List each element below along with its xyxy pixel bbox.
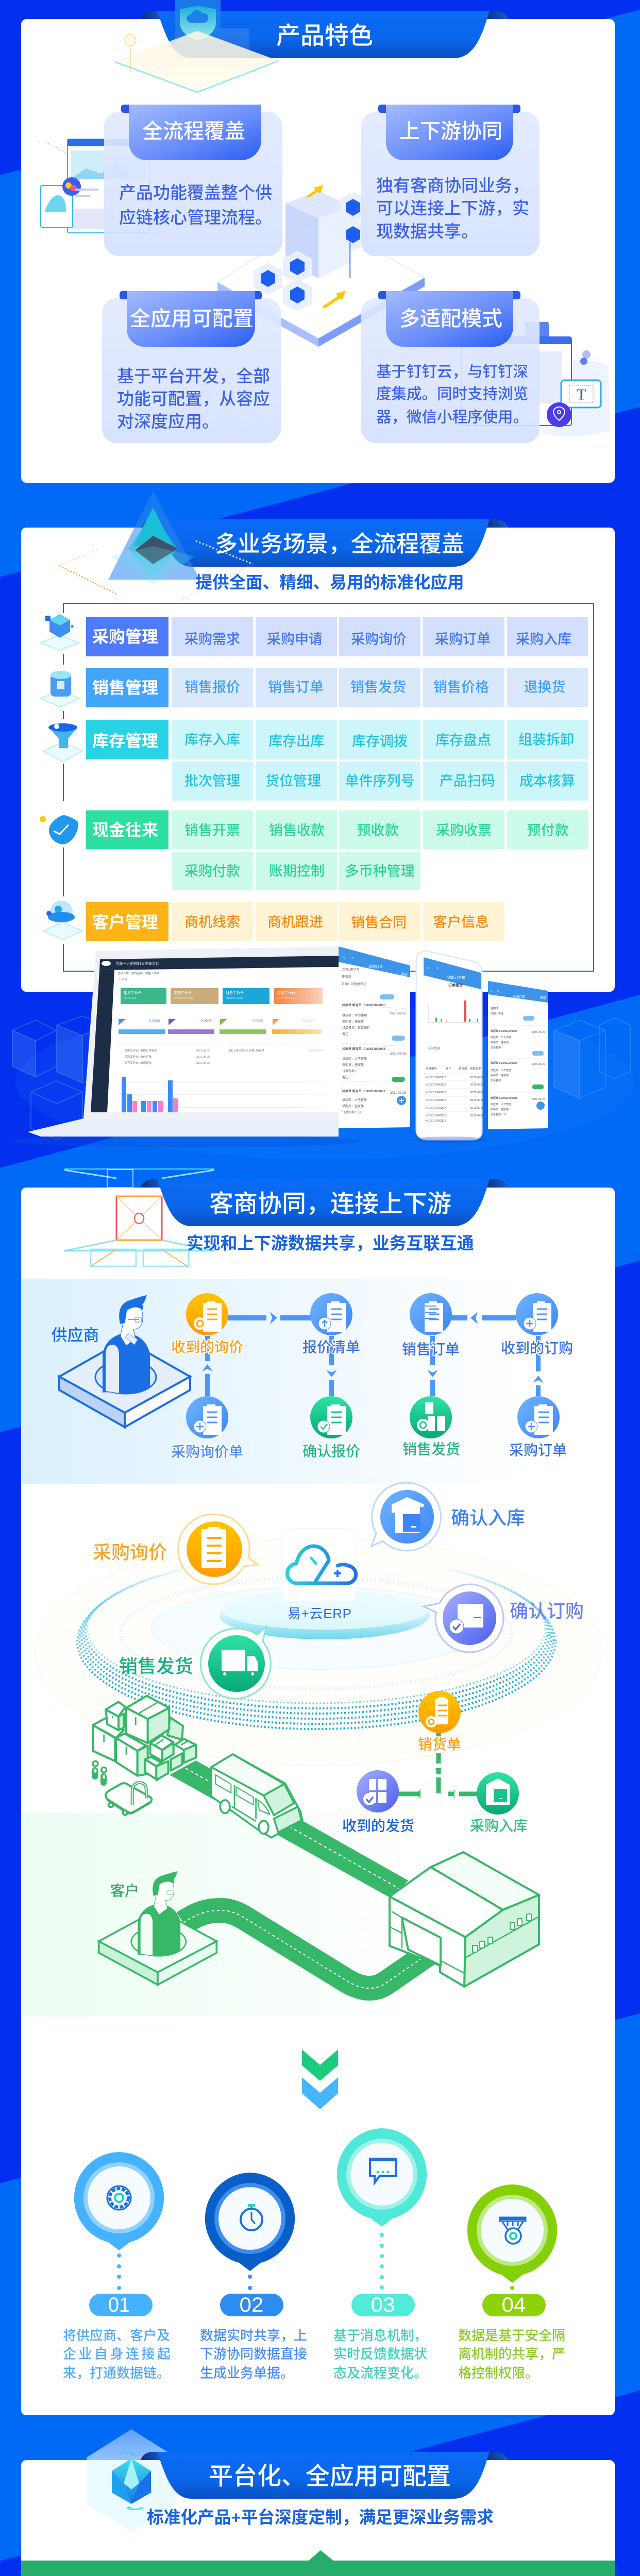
phone mockup left: 备注： bbox=[342, 1032, 351, 1036]
mini flow: 销货单 bbox=[342, 1691, 528, 1834]
laptop mockup: 2021-09-26 bbox=[196, 1062, 210, 1065]
decoration: diamond platform bbox=[115, 31, 279, 92]
laptop mockup: SALES DESK bbox=[124, 996, 137, 999]
supplier figure bbox=[52, 1295, 190, 1427]
card: 全应用可配置: 基于平台开发，全部 bbox=[117, 367, 270, 385]
heading ribbon: 产品特色: 产品特色 bbox=[276, 22, 373, 49]
phone mockup left: 供应商：华为伟利 bbox=[342, 1013, 367, 1018]
phone mockup right: 任丽涛 bbox=[491, 1007, 498, 1010]
phone mockup left: 订单名称：某位物料 bbox=[342, 1026, 370, 1030]
subtitle: 提供全面、精细、易用的标准化应用 bbox=[195, 573, 464, 591]
icon: customer globe bbox=[39, 896, 83, 944]
pin 01: gear: 将供应商、客户及 bbox=[63, 2328, 170, 2343]
icon: purchasing cube bbox=[39, 613, 80, 654]
decoration: app windows right bbox=[461, 322, 610, 436]
phone mockup right: 供应商：大华智能 bbox=[491, 1103, 511, 1106]
row: 采购管理: 采购询价 bbox=[351, 632, 407, 647]
phone mockup middle: XSDD*JIRXD02 bbox=[426, 1099, 446, 1102]
card: 上下游协同: 现数据共享。 bbox=[376, 222, 478, 241]
laptop mockup: 我的桌面 bbox=[131, 971, 143, 975]
phone mockup middle: XSDD*JIRXD02 bbox=[426, 1107, 446, 1110]
phone mockup left: 任丽涛 bbox=[342, 975, 351, 979]
icon: cash shield bbox=[39, 801, 80, 848]
phone mockup right: 采购员：任家旗 bbox=[491, 1108, 509, 1111]
phone mockup middle: × bbox=[436, 967, 439, 971]
row: 销售管理: 销售发货 bbox=[350, 680, 406, 695]
laptop mockup: FINANCIAL DESK bbox=[226, 996, 243, 999]
phone mockup right: 相原单 CO0021090001 bbox=[491, 1096, 517, 1100]
laptop mockup: 0.0000 bbox=[149, 1019, 160, 1023]
bubble: 确认入库: 确认入库 bbox=[451, 1507, 525, 1528]
pin 01: gear: 来，打通数据链。 bbox=[63, 2365, 170, 2381]
phone mockup left: < bbox=[343, 956, 345, 960]
bubble: 确认入库 bbox=[372, 1483, 525, 1551]
laptop mockup: [本工单+库存工作单] 待审核 bbox=[229, 1048, 265, 1053]
node: 采购询价单: 采购询价单 bbox=[171, 1444, 243, 1460]
row: 采购管理: 采购申请 bbox=[267, 632, 323, 647]
laptop mockup: 2021-09-26 bbox=[196, 1056, 210, 1059]
decoration: app windows left bbox=[39, 139, 173, 234]
mini flow: 销货单: 销货单 bbox=[418, 1736, 461, 1753]
row: 库存管理: 库存管理 bbox=[92, 732, 158, 750]
phone mockup left: 备注： bbox=[342, 1075, 351, 1079]
row: 客户管理: 销售合同 bbox=[351, 915, 407, 930]
icon: sales cylinder bbox=[39, 665, 80, 711]
row: 现金往来: 预付款 bbox=[527, 823, 569, 838]
row: 库存管理: 成本核算 bbox=[519, 773, 575, 789]
row: 采购管理 bbox=[86, 617, 588, 656]
phone mockup middle: 2021-09-06 bbox=[470, 1083, 484, 1087]
row: 现金往来: 销售收款 bbox=[269, 823, 325, 838]
laptop mockup bbox=[28, 946, 339, 1137]
node: 收到的询价: 收到的询价 bbox=[171, 1340, 243, 1355]
card: 多适配模式: 基于钉钉云，与钉钉深 bbox=[376, 364, 528, 380]
phone mockup middle: XSDD*JIRXD02 bbox=[426, 1120, 446, 1123]
phone mockup middle: 2021-09-06 bbox=[470, 1076, 484, 1079]
phone mockup right: < bbox=[491, 990, 493, 993]
phone mockup left: 您有1笔待办 bbox=[342, 968, 359, 972]
phone mockup middle: XSDD*JIRXD02 bbox=[426, 1083, 446, 1087]
node: 确认报价: 确认报价 bbox=[302, 1444, 360, 1459]
illustration: delivery road bbox=[170, 1760, 408, 1899]
illustration: delivery van bbox=[211, 1754, 302, 1838]
card: 多适配模式: 器，微信小程序使用。 bbox=[376, 409, 528, 426]
laptop mockup: 内部平元的物料仓库都大代 bbox=[116, 961, 159, 965]
phone mockup right: 相原单 CO0021090005 bbox=[491, 1029, 517, 1033]
phone mockup middle: 2021-09-06 bbox=[470, 1099, 484, 1102]
pin 01: gear bbox=[63, 2152, 171, 2381]
supplier figure: 供应商 bbox=[52, 1326, 99, 1345]
illustration: customer figure bbox=[99, 1871, 216, 1985]
phone mockup right: 供应商：大华智能 bbox=[491, 1069, 511, 1072]
bubble: 确认订购 bbox=[424, 1584, 584, 1652]
row: 现金往来: 账期控制 bbox=[269, 863, 325, 879]
subtitle: 标准化产品+平台深度定制，满足更深业务需求 bbox=[147, 2508, 494, 2527]
app tile: 易+云ERP bbox=[282, 1529, 356, 1621]
supplier flow band bbox=[21, 1279, 615, 1484]
phone mockup middle: 销售额 bbox=[459, 1066, 467, 1071]
phone mockup left: 日期：可根据筛记 bbox=[342, 982, 366, 986]
bubble: 销售发货 bbox=[119, 1626, 271, 1699]
laptop mockup: 采购工作台 bbox=[174, 990, 192, 995]
row: 库存管理: 批次管理 bbox=[184, 773, 240, 789]
node: 采购询价单 bbox=[171, 1396, 243, 1460]
node: 收到的订购: 收到的订购 bbox=[501, 1341, 573, 1356]
laptop mockup: [库存工作台] 单据审核 bbox=[124, 1061, 152, 1065]
phone mockup middle: 2021-09-06 bbox=[470, 1107, 484, 1110]
pin 03: chat: 03 bbox=[371, 2294, 395, 2316]
laptop mockup: 选项工作 bbox=[117, 971, 129, 975]
pin 02: clock bbox=[200, 2173, 307, 2381]
panel: multi-scenario bbox=[21, 491, 615, 1143]
pin 01: gear: 01 bbox=[108, 2294, 130, 2316]
card: 全应用可配置: 对深度应用。 bbox=[117, 412, 219, 431]
pin 03: chat bbox=[333, 2128, 427, 2381]
mini flow: 销货单: 采购入库 bbox=[470, 1818, 528, 1834]
laptop mockup: [采购工作台] 询价订单 bbox=[124, 1055, 152, 1059]
bubble: 销售发货: 销售发货 bbox=[119, 1656, 193, 1676]
node: 确认报价 bbox=[302, 1396, 360, 1459]
phone mockup left bbox=[339, 946, 410, 1128]
phone mockup middle: XSDD*JIRXD02 bbox=[426, 1114, 446, 1117]
pin 01: gear: 企业自身连接起 bbox=[63, 2346, 171, 2362]
phone mockup right: 2021-09-26 bbox=[532, 1063, 545, 1066]
phone mockup right: 采购员：任家旗 bbox=[491, 1074, 509, 1077]
pin 04: medal: 数据是基于安全隔 bbox=[458, 2328, 565, 2343]
phone mockup middle: 订单图谱 bbox=[448, 983, 463, 987]
card: 全流程覆盖: 全流程覆盖 bbox=[142, 120, 245, 143]
phone mockup left: 采购员：任家旗 bbox=[342, 1063, 364, 1067]
phone mockup left: 采购订单 bbox=[368, 964, 383, 969]
subtitle: 实现和上下游数据共享，业务互联互通 bbox=[187, 1233, 474, 1253]
heading ribbon: 平台化、全应用可配置 bbox=[141, 2452, 508, 2499]
card: 上下游协同 bbox=[361, 105, 540, 256]
phone mockup right: 订单名称： bbox=[491, 1079, 503, 1082]
phone mockup left: × bbox=[351, 956, 353, 960]
phone mockup right: 2021-09-26 bbox=[532, 1098, 545, 1101]
phone mockup left: 订单名称：23 bbox=[342, 1110, 361, 1114]
node: 采购订单: 采购订单 bbox=[509, 1443, 567, 1458]
app tile: 易+云ERP: 易+云ERP bbox=[288, 1606, 351, 1621]
mini flow: 销货单: 收到的发货 bbox=[342, 1818, 414, 1834]
flow connectors bbox=[202, 1312, 544, 1396]
icon: shield with cloud bbox=[175, 0, 221, 44]
heading ribbon: 多业务场景，全流程覆盖 bbox=[141, 519, 508, 567]
laptop mockup: 0.0000 bbox=[252, 1019, 263, 1023]
laptop mockup: 2021-09-26 bbox=[309, 1049, 324, 1053]
phone mockup left: 筛选 bbox=[401, 972, 408, 977]
row: 销售管理: 销售管理 bbox=[92, 679, 158, 697]
row: 采购管理: 采购管理 bbox=[92, 628, 158, 646]
heading ribbon: 平台化、全应用可配置: 平台化、全应用可配置 bbox=[209, 2463, 451, 2489]
row: 销售管理: 销售价格 bbox=[433, 680, 489, 695]
pin 04: medal: 04 bbox=[502, 2294, 526, 2316]
node: 收到的询价 bbox=[171, 1293, 243, 1355]
icon: crystal gem bbox=[112, 2452, 151, 2510]
phone mockup right: × bbox=[497, 990, 499, 993]
laptop mockup: 销售工作台 bbox=[124, 990, 142, 995]
row: 销售管理 bbox=[86, 668, 588, 707]
laptop mockup: 销售工作台 bbox=[145, 971, 160, 975]
phone mockup right: 订单名称：25 bbox=[491, 1113, 507, 1116]
phone mockup middle: < bbox=[427, 967, 429, 971]
laptop mockup: 0.0000 bbox=[200, 1019, 212, 1023]
pin 04: medal: 格控制权限。 bbox=[458, 2365, 538, 2381]
phone mockup right: 供应商：华为伟利 bbox=[491, 1036, 511, 1039]
laptop mockup: 财务工作台 bbox=[226, 990, 244, 995]
row: 现金往来 bbox=[86, 810, 588, 890]
card: 全流程覆盖 bbox=[104, 105, 282, 256]
pin 02: clock: 下游协同数据直接 bbox=[200, 2346, 307, 2362]
phone mockup left: 相原单 眼克单: CO0021090005 bbox=[342, 1003, 385, 1007]
row: 采购管理: 采购入库 bbox=[516, 632, 571, 647]
bubble: 采购询价 bbox=[93, 1514, 258, 1584]
row: 库存管理: 库存盘点 bbox=[435, 733, 491, 748]
heading ribbon: 客商协同，连接上下游: 客商协同，连接上下游 bbox=[209, 1190, 451, 1217]
row: 销售管理: 退换货 bbox=[524, 680, 566, 695]
node: 采购订单 bbox=[509, 1396, 567, 1458]
panel: product features bbox=[21, 0, 615, 483]
rings behind ERP hub bbox=[35, 1538, 602, 1765]
phone mockup right: 2021-09-26 bbox=[532, 1031, 545, 1034]
frame around module table bbox=[63, 603, 594, 971]
phone mockup right bbox=[488, 981, 548, 1129]
card: 全应用可配置: 功能可配置，从容应 bbox=[117, 389, 270, 408]
phone mockup left: 供应商：大华智能 bbox=[342, 1098, 367, 1102]
row: 客户管理: 客户管理 bbox=[92, 913, 158, 931]
row: 现金往来: 采购收票 bbox=[436, 823, 492, 838]
row: 库存管理: 组装拆卸 bbox=[518, 732, 574, 748]
node: 销售订单 bbox=[402, 1293, 460, 1357]
pin 03: chat: 实时反馈数据状 bbox=[333, 2346, 427, 2362]
card: 上下游协同: 独有客商协同业务， bbox=[376, 176, 529, 195]
phone mockup right: 相原单 CO0021090002 bbox=[491, 1061, 517, 1065]
phone mockup left: 2021-09-26 bbox=[390, 1012, 406, 1015]
row: 客户管理: 商机线索 bbox=[184, 914, 240, 930]
row: 库存管理: 库存入库 bbox=[184, 732, 240, 748]
laptop mockup: 工作台 bbox=[119, 977, 127, 981]
phone mockup left: 采购员：任家旗 bbox=[342, 1020, 364, 1024]
node: 报价清单: 报价清单 bbox=[302, 1340, 360, 1355]
pin 02: clock: 生成业务单据。 bbox=[200, 2365, 294, 2381]
row: 销售管理: 销售订单 bbox=[268, 680, 324, 695]
laptop mockup: PURCHASING DESK bbox=[174, 996, 194, 999]
card: 上下游协同: 可以连接上下游，实 bbox=[376, 199, 529, 217]
illustration: warehouse bbox=[390, 1852, 539, 1987]
green configuration stage bbox=[21, 2550, 615, 2576]
pin 02: clock: 数据实时共享，上 bbox=[200, 2328, 307, 2343]
phone mockup right: 订单名称： bbox=[491, 1046, 503, 1049]
node: 报价清单 bbox=[302, 1293, 360, 1355]
decoration: app windows right: T bbox=[577, 386, 586, 403]
card: 多适配模式: 度集成。同时支持浏览 bbox=[376, 385, 528, 403]
row: 采购管理: 采购订单 bbox=[435, 632, 491, 647]
phone mockup middle: 2021-09-06 bbox=[470, 1114, 484, 1117]
bubble: 确认订购: 确认订购 bbox=[510, 1600, 584, 1622]
decoration: central isometric platform bbox=[217, 185, 425, 347]
row: 库存管理: 库存出库 bbox=[268, 734, 324, 749]
pin 04: medal bbox=[458, 2184, 565, 2381]
phone mockup right: 日期：筛选 bbox=[491, 1012, 503, 1015]
card: 全流程覆盖: 产品功能覆盖整个供 bbox=[119, 183, 272, 202]
laptop mockup: [采购工作台] 采购订单审核 bbox=[124, 1048, 158, 1053]
illustration: customer figure: 客户 bbox=[110, 1883, 139, 1899]
row: 客户管理: 商机跟进 bbox=[267, 914, 323, 930]
pin 02: clock: 02 bbox=[239, 2294, 264, 2316]
phone mockup left: 相原单 眼克单: CO0021090001 bbox=[342, 1089, 385, 1093]
icon: pyramid bbox=[59, 491, 253, 600]
icon backdrop: translucent cube bbox=[87, 2429, 176, 2532]
phone mockup middle: 单据编号 bbox=[426, 1066, 437, 1071]
row: 现金往来: 预收款 bbox=[357, 823, 399, 838]
phone mockup right: 采购订单 bbox=[513, 995, 525, 999]
card: 多适配模式 bbox=[361, 291, 540, 443]
row: 库存管理: 货位管理 bbox=[265, 773, 321, 789]
row: 库存管理 bbox=[86, 720, 588, 801]
laptop mockup: 库存工作台 bbox=[277, 990, 295, 995]
bubble: 采购询价: 采购询价 bbox=[93, 1541, 167, 1563]
card: 全流程覆盖: 应链核心管理流程。 bbox=[119, 208, 272, 227]
phone mockup middle: XSDD*JIRXD02 bbox=[426, 1091, 446, 1094]
phone mockup middle: 收款日期 bbox=[470, 1066, 482, 1071]
phone mockup left: 采购员：任家旗 bbox=[342, 1104, 364, 1108]
laptop mockup: 86.3800 bbox=[302, 1019, 316, 1023]
panel: platform configurable bbox=[21, 2429, 615, 2576]
node: 销售发货: 销售发货 bbox=[402, 1442, 460, 1457]
phone mockup left: 2021-09-26 bbox=[390, 1092, 406, 1095]
icon: inventory funnel bbox=[40, 719, 85, 764]
phone mockup right: 筛选 bbox=[540, 996, 546, 1000]
pin 03: chat: 态及流程变化。 bbox=[333, 2365, 427, 2381]
customer flow band bbox=[21, 1812, 615, 2016]
phone mockup middle: XSDD*JIRXD02 bbox=[426, 1076, 446, 1079]
phone mockup middle: 2021-09-06 bbox=[470, 1091, 484, 1094]
laptop mockup: INVENTORY DESK bbox=[277, 996, 295, 999]
phone mockup middle: 当前数据 bbox=[428, 1046, 440, 1050]
phone mockup left: 订单名称： bbox=[342, 1069, 358, 1073]
heading ribbon: 产品特色 bbox=[141, 11, 508, 58]
phone mockup middle: 客户 bbox=[446, 1066, 451, 1071]
row: 现金往来: 销售开票 bbox=[184, 823, 240, 838]
pin 04: medal: 离机制的共享，严 bbox=[458, 2346, 565, 2362]
illustration: stacked boxes and cart bbox=[92, 1696, 196, 1815]
phone mockup middle: 销售订单报 bbox=[447, 975, 465, 980]
row: 客户管理: 客户信息 bbox=[433, 914, 489, 930]
illustration: road to customer bbox=[183, 1910, 429, 1988]
node: 收到的订购 bbox=[501, 1293, 573, 1356]
row: 销售管理: 销售报价 bbox=[184, 680, 240, 695]
node: 销售订单: 销售订单 bbox=[402, 1342, 460, 1357]
row: 采购管理: 采购需求 bbox=[184, 632, 240, 647]
row: 客户管理 bbox=[86, 902, 504, 941]
pin 03: chat: 基于消息机制， bbox=[333, 2328, 427, 2343]
heading ribbon: 多业务场景，全流程覆盖: 多业务场景，全流程覆盖 bbox=[215, 532, 464, 556]
card: 全应用可配置: 全应用可配置 bbox=[130, 308, 254, 330]
hub disk bbox=[220, 1590, 430, 1639]
row: 现金往来: 现金往来 bbox=[92, 821, 158, 839]
heading ribbon: 客商协同，连接上下游 bbox=[141, 1179, 508, 1226]
phone mockup left: 2021-09-26 bbox=[390, 1053, 406, 1056]
row: 库存管理: 库存调拨 bbox=[352, 734, 408, 749]
card: 全应用可配置 bbox=[102, 291, 281, 443]
row: 现金往来: 多币种管理 bbox=[345, 863, 414, 879]
phone mockup left: 供应商：大华智能 bbox=[342, 1057, 367, 1061]
arrow: double chevron bbox=[302, 2049, 338, 2109]
row: 现金往来: 采购付款 bbox=[184, 863, 240, 879]
phone mockup right: 采购员：任家旗 bbox=[491, 1041, 509, 1044]
phone mockup left: 相原单 眼克单: CO0021090002 bbox=[342, 1047, 385, 1051]
icon: wire cube bbox=[64, 1169, 214, 1266]
card: 上下游协同: 上下游协同 bbox=[399, 120, 502, 143]
row: 库存管理: 单件序列号 bbox=[345, 773, 414, 789]
node: 销售发货 bbox=[402, 1396, 460, 1457]
laptop mockup: 2021-09-26 bbox=[196, 1049, 210, 1053]
phone mockup middle bbox=[413, 951, 485, 1143]
row: 库存管理: 产品扫码 bbox=[440, 773, 495, 789]
panel: supplier and customer collaboration bbox=[21, 1169, 615, 2415]
card: 多适配模式: 多适配模式 bbox=[399, 308, 502, 330]
